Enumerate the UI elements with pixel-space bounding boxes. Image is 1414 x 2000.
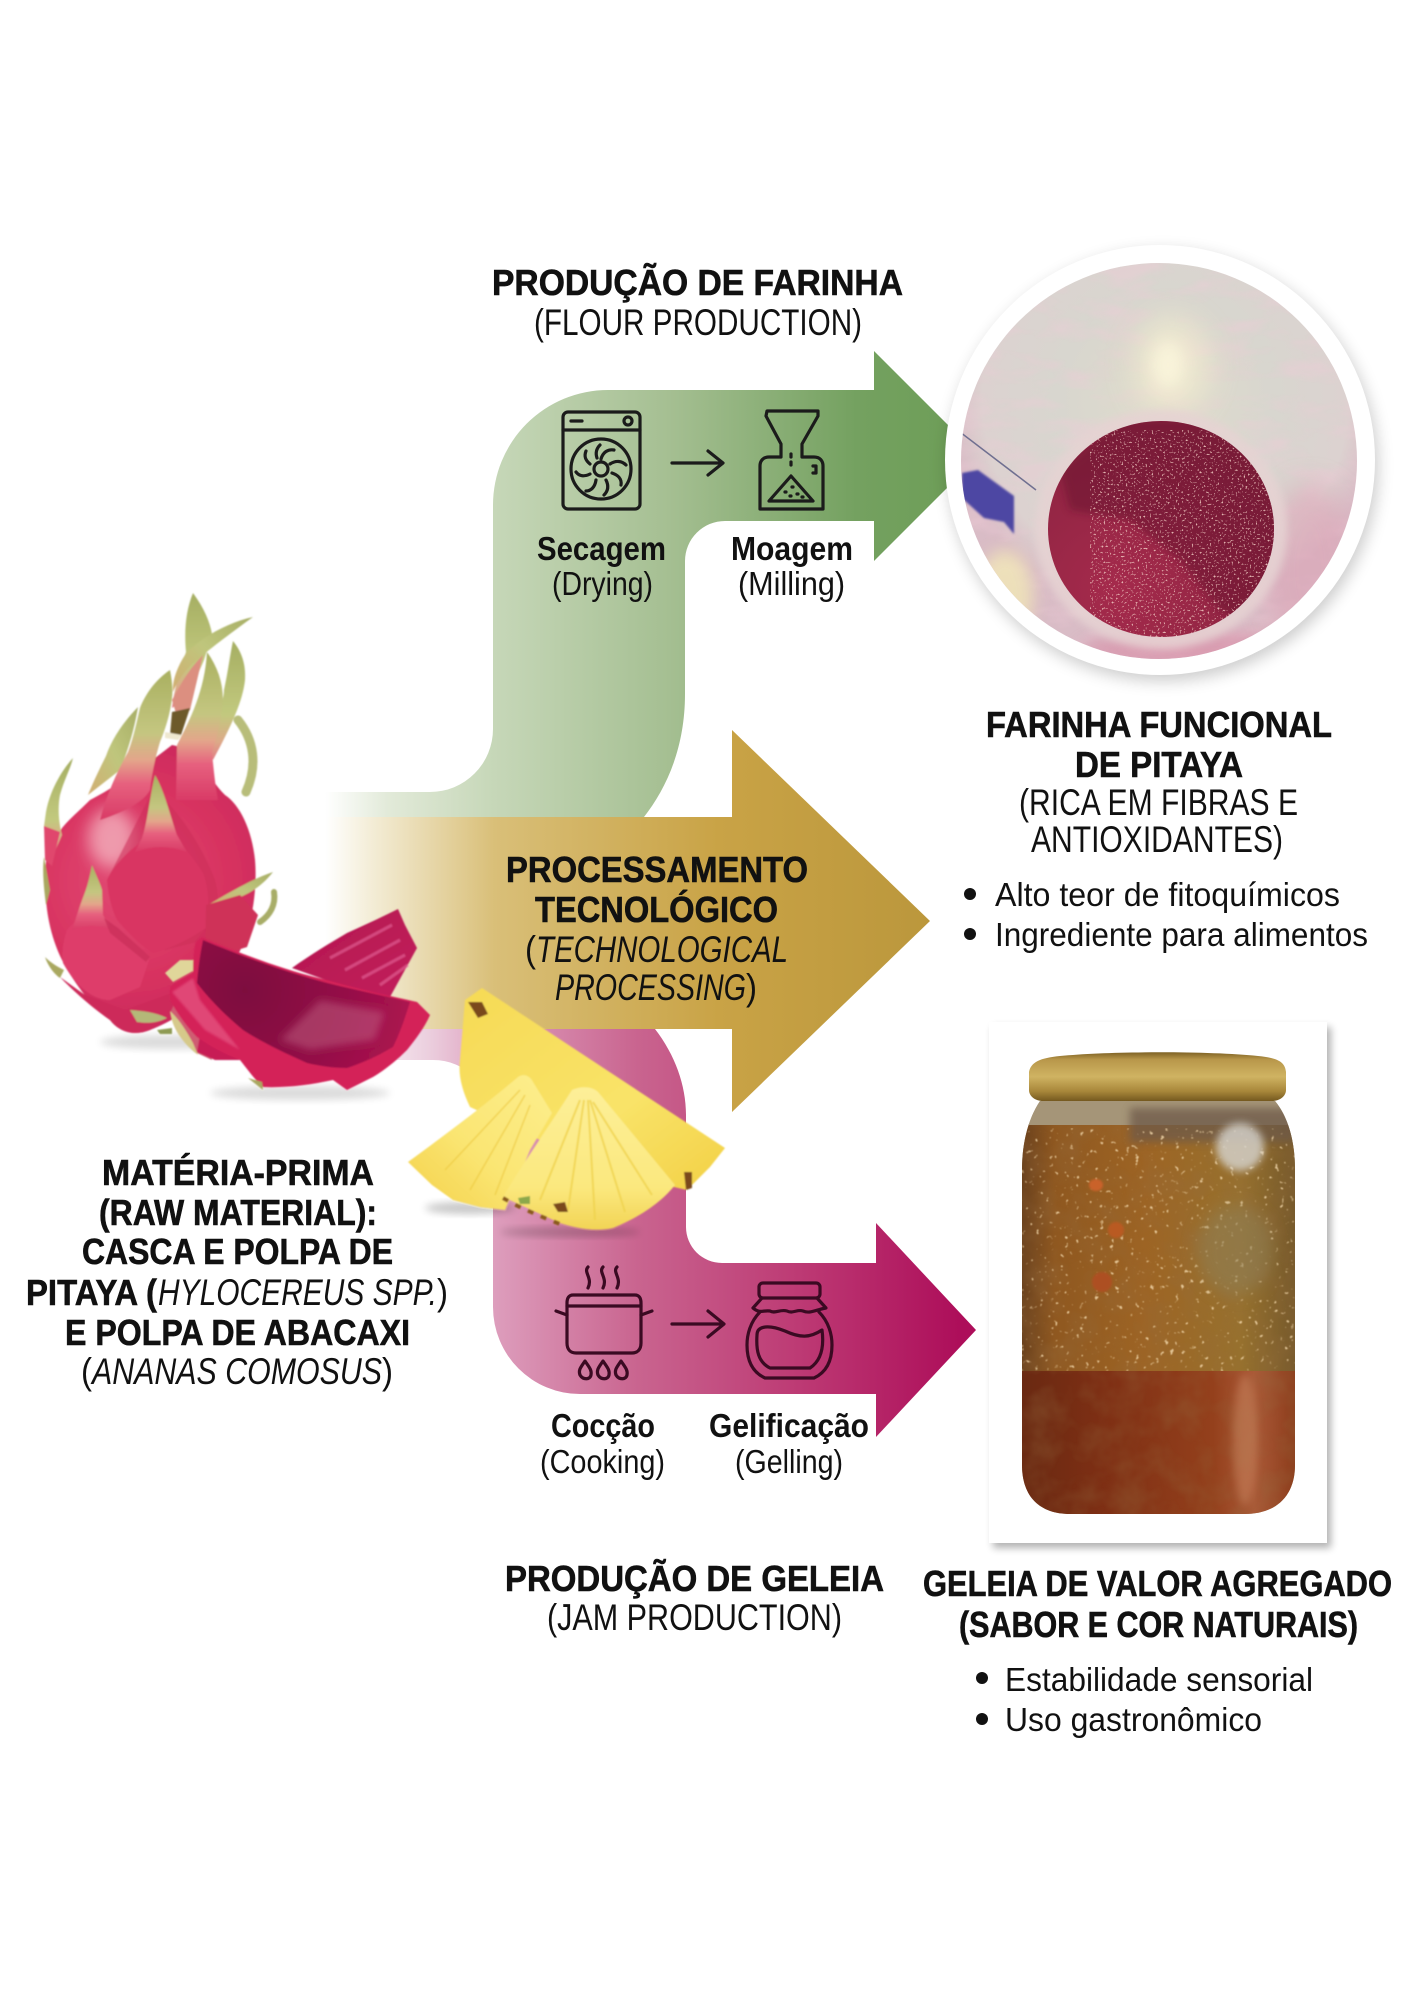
block: raw material: PITAYA ( [26,1272,157,1313]
panel: flour photo in circle [945,245,1378,681]
label: gelling step [709,1407,869,1480]
block: functional flour description [964,704,1368,953]
block: raw material: MATÉRIA-PRIMA [102,1152,374,1193]
label: gelling step: (Gelling) [735,1443,843,1480]
block: functional flour description: Alto teor de fitoquímicos [995,876,1340,913]
illustration: dragon fruit [43,593,274,1049]
label: milling step: Moagem [731,530,853,567]
heading: technological processing: PROCESSAMENTO [506,849,808,890]
label: cooking step: Cocção [551,1407,655,1444]
heading: jam production: PRODUÇÃO DE GELEIA [505,1557,884,1599]
heading: flour production: PRODUÇÃO DE FARINHA [492,261,903,303]
block: raw material: CASCA E POLPA DE [82,1231,393,1272]
heading: jam production: (JAM PRODUCTION) [547,1597,842,1638]
heading: technological processing: ) [746,967,757,1008]
block: functional flour description: FARINHA FUNCIONAL [986,704,1332,745]
label: drying step: (Drying) [552,565,653,602]
icon: cooking pot [556,1267,652,1379]
label: cooking step [540,1407,665,1480]
heading: technological processing: PROCESSING [555,967,746,1008]
heading: technological processing: TECHNOLOGICAL [536,929,788,970]
block: functional flour description: Ingrediente para alimentos [995,916,1368,953]
heading: flour production [492,261,903,343]
block: raw material [26,1152,448,1392]
icon: drying machine [563,412,640,509]
heading: technological processing [506,849,808,1008]
block: raw material: ) [437,1272,448,1313]
block: raw material: (RAW MATERIAL): [99,1192,377,1233]
label: drying step: Secagem [537,530,666,567]
block: value-added jam description: Estabilidade sensorial [1005,1661,1313,1698]
icon: milling funnel [760,411,823,509]
heading: technological processing: TECNOLÓGICO [535,888,778,930]
arrow: flour production branch [325,351,979,817]
arrow: technological processing [325,730,930,1112]
panel: jam jar photo [989,1022,1331,1548]
block: functional flour description: (RICA EM FIBRAS E [1019,782,1298,823]
illustration: pineapple wedges [408,988,725,1237]
block: raw material: ) [382,1351,393,1392]
icon: arrow cooking to gelling [672,1311,724,1337]
illustration: dragon fruit peel [165,909,430,1100]
label: gelling step: Gelificação [709,1407,869,1444]
heading: technological processing: ( [525,929,537,970]
icon: jam jar [747,1283,832,1378]
block: raw material: E POLPA DE ABACAXI [65,1312,410,1353]
icon: arrow drying to milling [672,451,723,475]
arrow: jam production branch [340,1029,976,1437]
label: milling step [731,530,853,602]
label: milling step: (Milling) [738,565,845,602]
block: raw material: ANANAS COMOSUS [90,1351,382,1392]
block: raw material: ( [81,1351,93,1392]
block: functional flour description: DE PITAYA [1075,744,1243,785]
block: value-added jam description [923,1563,1392,1738]
block: functional flour description: ANTIOXIDANTES) [1031,819,1283,860]
heading: flour production: (FLOUR PRODUCTION) [534,302,862,343]
label: drying step [537,530,666,602]
block: raw material: HYLOCEREUS SPP. [158,1272,437,1313]
label: cooking step: (Cooking) [540,1443,665,1480]
block: value-added jam description: Uso gastronômico [1005,1701,1262,1738]
heading: jam production [505,1557,884,1638]
